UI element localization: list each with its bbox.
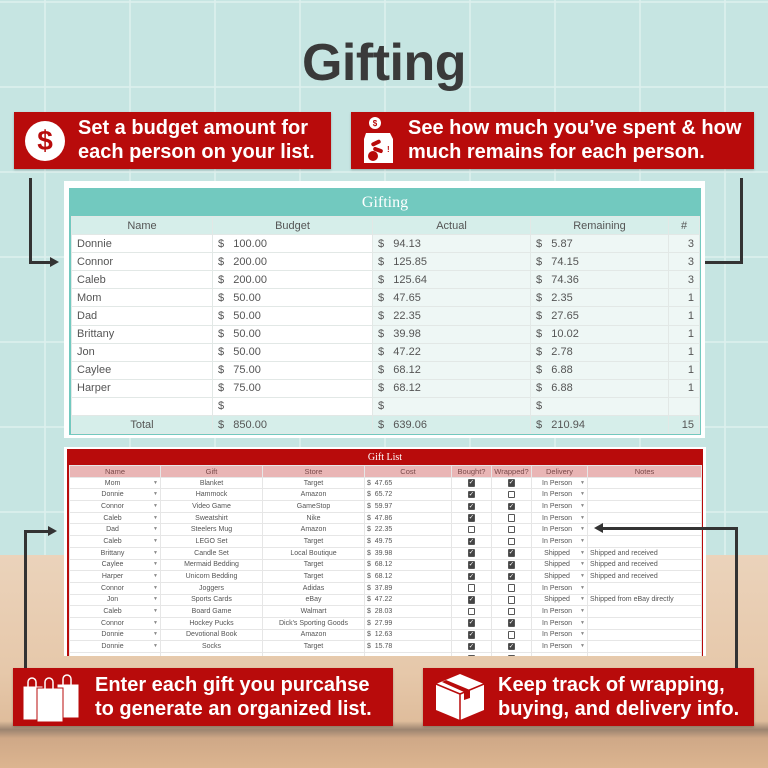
gift list table: ✓ [509,619,514,626]
budget table: Donnie [77,238,112,250]
gift list table: ✓ [469,503,474,510]
gift list table: Connor [101,620,124,627]
gift list table: ▼ [580,561,585,567]
budget table: 3 [688,238,694,250]
budget table: $ 639.06 [378,419,427,431]
budget table: $ 47.65 [378,292,421,304]
gift list table: Gift [206,467,217,476]
gift list table: Devotional Book [186,631,237,638]
budget table: # [681,220,687,232]
gift list table: Video Game [192,503,231,510]
gift list table: Brittany [101,550,124,557]
gift list table: Mermaid Bedding [184,561,239,568]
gift list table: Connor [101,503,124,510]
budget table: 15 [682,419,694,431]
gift list table: ▼ [580,526,585,532]
gift list table: Adidas [303,585,324,592]
gift list table: ✓ [509,643,514,650]
gift list table: ✓ [469,514,474,521]
gift list table: Dick's Sporting Goods [279,620,348,627]
gift list table: Unicorn Bedding [186,573,237,580]
gift list table: Amazon [301,491,326,498]
budget table: Connor [77,256,113,268]
gift list table: ▼ [153,643,158,649]
gift list table: eBay [306,596,321,603]
gift list table: Shipped and received [590,550,658,557]
gift list table: ▼ [580,608,585,614]
gift list table: ✓ [469,561,474,568]
budget table: $ 2.35 [536,292,573,304]
icon: money jar: ! [387,145,390,154]
gift list table: ▼ [153,561,158,567]
table title [71,190,699,216]
gift list table: Candle Set [194,550,229,557]
gift list table: Caleb [103,515,122,522]
gift list table: $ 49.75 [367,538,392,545]
budget table: $ 75.00 [218,382,261,394]
arrow: bottom right [594,523,738,668]
gift list table: Store [305,467,322,476]
gift list table: ✓ [509,561,514,568]
budget table: Caleb [77,274,106,286]
gift list table: Connor [101,585,124,592]
gift list table: ▼ [153,526,158,532]
gift list table: ▼ [580,573,585,579]
budget table: 3 [688,256,694,268]
gift list table: ▼ [580,515,585,521]
gift list table: $ 39.98 [367,550,392,557]
budget table [71,216,700,434]
gift list table: ▼ [153,515,158,521]
budget table: 1 [688,346,694,358]
gift list table: GameStop [297,503,330,510]
budget table: $ 94.13 [378,238,421,250]
gift list table: ▼ [153,550,158,556]
gift list table: ✓ [469,491,474,498]
gift list table: In Person [542,503,572,510]
gift list table: Target [304,643,323,650]
icon: package box [436,674,484,720]
gift list table: Wrapped? [494,467,529,476]
gift list table: Name [105,467,125,476]
budget table: Dad [77,310,97,322]
gift list table: In Person [542,620,572,627]
gift list table: ▼ [580,596,585,602]
gift list table: Shipped [544,550,570,557]
gift list table: In Person [542,515,572,522]
budget table: $ 39.98 [378,328,421,340]
gift list table: Sweatshirt [195,515,228,522]
callout: enter each gift [13,668,393,726]
gift list table: ▼ [153,538,158,544]
budget table: 1 [688,382,694,394]
gift list title: Gift List [368,452,402,463]
arrow: bottom left [24,526,57,668]
budget table: $ 850.00 [218,419,267,431]
gift list table: $ 12.63 [367,631,392,638]
gift list table: Mom [105,480,120,487]
gift list table: ✓ [469,549,474,556]
icon: money jar: $ [373,119,378,128]
gift list table: In Person [542,526,572,533]
gift list table: Delivery [546,467,573,476]
budget table: $ 125.64 [378,274,427,286]
callout: keep track: buying, and delivery info. [498,698,739,720]
budget table: 1 [688,310,694,322]
gift list table: Target [304,480,323,487]
gift list table: ▼ [153,631,158,637]
gift list table: $ 68.12 [367,561,392,568]
budget table: Harper [77,382,111,394]
gift list table: Shipped and received [590,561,658,568]
gift list table: In Person [542,538,572,545]
callout: see spent: See how much you’ve spent & how [408,117,741,139]
gift list table: Jon [107,596,118,603]
budget table: $ [378,400,384,412]
gift list table: Nike [306,515,320,522]
gift list table: ✓ [509,479,514,486]
gift list table: Steelers Mug [191,526,232,533]
gift list table: Amazon [301,631,326,638]
gift list table: ✓ [509,503,514,510]
budget table: $ 68.12 [378,364,421,376]
budget table: Budget [275,220,310,232]
gift list table: Donnie [101,643,124,650]
gift list table: Hockey Pucks [189,620,234,627]
callout: keep track: Keep track of wrapping, [498,674,725,696]
gift list table: In Person [542,491,572,498]
budget table: Total [130,419,154,431]
gift list table: ▼ [153,573,158,579]
gift list table: Dad [106,526,119,533]
gift list table: ✓ [509,549,514,556]
gift list table: ✓ [469,631,474,638]
icon: dollar circle [25,121,65,161]
gift list table: ▼ [153,608,158,614]
budget table: 3 [688,274,694,286]
budget table: $ 210.94 [536,419,585,431]
gift list table: Harper [102,573,123,580]
gift list table: Target [304,538,323,545]
gift list table: Socks [202,643,221,650]
budget table: $ 125.85 [378,256,427,268]
budget table: $ 6.88 [536,364,573,376]
budget table: Mom [77,292,101,304]
gift list table: LEGO Set [196,538,227,545]
gift list table: Donnie [101,631,124,638]
callout: keep track [423,668,754,726]
gift list table: Hammock [196,491,227,498]
gift list table: ▼ [153,503,158,509]
gift list table: ▼ [153,596,158,602]
gift list table: Shipped [544,573,570,580]
gift list table: Caylee [102,561,123,568]
icon: dollar circle: $ [37,125,53,156]
gift list table: Amazon [301,526,326,533]
gift list table: Shipped and received [590,573,658,580]
panel: gifting budget table [64,181,705,438]
budget table: $ 68.12 [378,382,421,394]
budget table: Actual [436,220,467,232]
gift list table: ▼ [580,538,585,544]
gift list table: ✓ [469,619,474,626]
gift list table: ▼ [153,585,158,591]
gift list table: In Person [542,585,572,592]
gift list table: Shipped from eBay directly [590,596,674,603]
callout: enter each gift: to generate an organized list. [95,698,372,720]
budget table: $ 74.15 [536,256,579,268]
gift list table: ▼ [153,491,158,497]
budget table: Caylee [77,364,111,376]
arrow: top left [29,178,59,267]
gift list table: ▼ [580,585,585,591]
budget table: $ [536,400,542,412]
gift list table: ▼ [580,550,585,556]
gift list table: ✓ [469,479,474,486]
gift list table: Donnie [101,491,124,498]
budget table: $ 47.22 [378,346,421,358]
budget table: $ 100.00 [218,238,267,250]
title: Gifting [302,34,466,92]
gift list table: Target [304,573,323,580]
budget table: $ 50.00 [218,292,261,304]
panel: gift list table [64,447,706,656]
gift list table: ✓ [509,573,514,580]
budget table: Jon [77,346,95,358]
gift list table: Cost [400,467,416,476]
gift list table: $ 28.03 [367,608,392,615]
gift list table: $ 59.97 [367,503,392,510]
gift list table: ▼ [580,480,585,486]
gift list table: Caleb [103,608,122,615]
icon: money jar [364,117,393,163]
callout: set budget [14,112,331,169]
budget table: $ 50.00 [218,328,261,340]
budget table: $ [218,400,224,412]
callout: set budget: Set a budget amount for [78,117,308,139]
gift list table: In Person [542,608,572,615]
gift list table: $ 47.65 [367,480,392,487]
budget table: Remaining [573,220,626,232]
gift list table: ▼ [580,503,585,509]
budget table: 1 [688,364,694,376]
gift list table: Shipped [544,596,570,603]
gift list table: Target [304,561,323,568]
budget table: Brittany [77,328,114,340]
gift list table: Sports Cards [191,596,232,603]
callout: enter each gift: Enter each gift you purcahse [95,674,370,696]
gift list table: $ 47.86 [367,515,392,522]
gift list table: Local Boutique [290,550,337,557]
gift list table: ▼ [580,620,585,626]
gift list table: In Person [542,480,572,487]
budget table: $ 27.65 [536,310,579,322]
arrow: top right [705,178,743,264]
budget table: $ 2.78 [536,346,573,358]
gift list title [69,451,701,465]
gift list table: Bought? [458,467,485,476]
gift list table: ✓ [469,573,474,580]
table title: Gifting [362,194,408,211]
budget table: 1 [688,292,694,304]
callout: see spent: much remains for each person. [408,141,705,163]
gift list table: Caleb [103,538,122,545]
budget table: $ 10.02 [536,328,579,340]
gift list table: ✓ [469,538,474,545]
budget table: Name [127,220,157,232]
budget table: $ 22.35 [378,310,421,322]
budget table: $ 6.88 [536,382,573,394]
budget table: $ 75.00 [218,364,261,376]
gift list table: $ 68.12 [367,573,392,580]
gift list table: ▼ [580,643,585,649]
callout: see spent [351,112,754,169]
budget table: 1 [688,328,694,340]
gift list table: $ 15.78 [367,643,392,650]
gift list table: Shipped [544,561,570,568]
gift list table: $ 27.99 [367,620,392,627]
gift list table: $ 22.35 [367,526,392,533]
budget table: $ 200.00 [218,256,267,268]
callout: set budget: each person on your list. [78,141,315,163]
gift list table: ▼ [153,620,158,626]
gift list table: Blanket [200,480,223,487]
budget table: $ 5.87 [536,238,573,250]
icon: shopping bags [24,674,78,722]
gift list table: ▼ [153,480,158,486]
gift list table [69,465,702,656]
gift list table: Joggers [199,585,224,592]
gift list table: In Person [542,643,572,650]
budget table: $ 50.00 [218,346,261,358]
gift list table: $ 47.22 [367,596,392,603]
gift list table: $ 65.72 [367,491,392,498]
gift list table: In Person [542,631,572,638]
budget table: $ 200.00 [218,274,267,286]
gift list table: Notes [635,467,654,476]
gift list table: $ 37.89 [367,585,392,592]
gift list table: ✓ [469,643,474,650]
gift list table: ▼ [580,491,585,497]
gift list table: ✓ [469,596,474,603]
gift list table: ▼ [580,631,585,637]
gift list table: Walmart [301,608,326,615]
budget table: $ 50.00 [218,310,261,322]
gift list table: Board Game [192,608,231,615]
budget table: $ 74.36 [536,274,579,286]
